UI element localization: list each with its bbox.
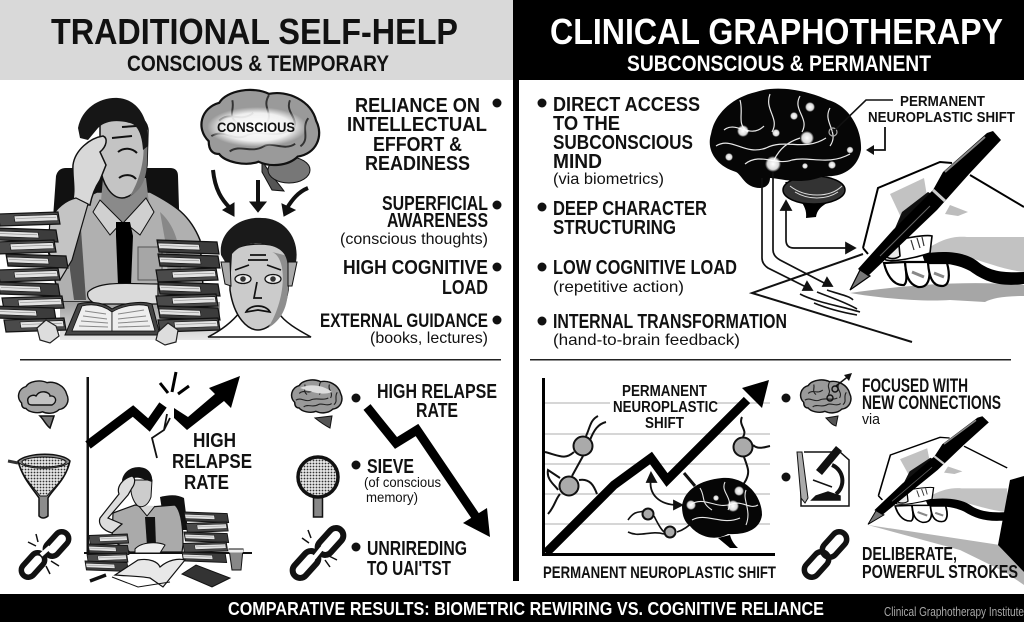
label: high relapse rate: RATE — [416, 400, 458, 422]
icon: sieve funnel — [8, 454, 70, 518]
brain — [682, 478, 762, 548]
label: high relapse rate — [377, 381, 497, 422]
icon: conscious brain — [201, 90, 319, 191]
bullet — [782, 394, 790, 402]
label: unrireding to uaitst: TO UAI'TST — [367, 558, 451, 580]
illustration: man at desk with books — [84, 467, 252, 587]
illustration: stressed man at desk with books — [0, 98, 220, 345]
arrows — [647, 473, 696, 526]
arrows: brain to head — [213, 170, 308, 216]
illustration: hand holding fountain pen — [868, 416, 1024, 585]
illustration: glowing brain — [710, 89, 861, 218]
item: internal transformation: INTERNAL TRANSFORMATION — [553, 311, 787, 333]
label: deliberate powerful strokes — [862, 543, 1018, 582]
divider: left — [20, 359, 501, 360]
icon: brain — [292, 380, 342, 428]
callout: permanent neuroplastic shift: PERMANENT — [900, 94, 985, 110]
chart label: permanent neuroplastic shift: SHIFT — [645, 415, 684, 432]
chart: neuroplastic growth — [542, 378, 775, 556]
chart: axis — [86, 377, 89, 553]
bullet — [782, 472, 790, 482]
column divider — [513, 0, 519, 581]
label: sieve of conscious memory: memory) — [366, 490, 418, 505]
label: focused with new connections via — [862, 376, 1001, 428]
item: reliance on intellectual effort and readiness: INTELLECTUAL — [347, 114, 487, 136]
item: superficial awareness — [340, 193, 502, 248]
crumpled paper — [156, 323, 178, 345]
item: external guidance — [320, 311, 502, 347]
paper with strokes — [752, 254, 912, 342]
bullet list: graphotherapy traits — [538, 94, 787, 349]
item: reliance on intellectual effort and readiness: EFFORT & — [373, 134, 462, 156]
subtitle: subconscious and permanent: SUBCONSCIOUS & PERMANENT — [627, 51, 931, 76]
item: deep character structuring — [538, 198, 707, 239]
item: reliance on intellectual effort and readiness — [347, 95, 502, 175]
label: high relapse rate: RELAPSE — [172, 451, 252, 473]
label: unrireding to uaitst — [367, 538, 467, 580]
item: internal transformation — [538, 311, 787, 349]
item: low cognitive load — [538, 257, 737, 296]
item: external guidance: EXTERNAL GUIDANCE — [320, 311, 488, 332]
divider: right — [530, 359, 1011, 360]
label: focused with new connections via: FOCUSED WITH — [862, 376, 968, 397]
illustration: hand writing with pen — [850, 131, 1024, 302]
label: unrireding to uaitst: UNRIREDING — [367, 538, 467, 560]
subtitle: conscious and temporary: CONSCIOUS & TEMPORARY — [127, 51, 389, 76]
arrows: hand-to-brain feedback loop — [762, 172, 855, 290]
label: high relapse rate: HIGH — [193, 430, 236, 452]
label: permanent neuroplastic shift: PERMANENT NEUROPLASTIC SHIFT — [543, 564, 776, 582]
icon: brain with cloud — [19, 381, 68, 428]
item: high cognitive load: LOAD — [442, 277, 488, 299]
icon: brain with new connections — [801, 373, 852, 426]
label: conscious: CONSCIOUS — [217, 119, 295, 135]
item: superficial awareness: SUPERFICIAL — [382, 193, 488, 215]
icon: chain link — [290, 525, 346, 581]
item: direct access to the subconscious mind: DIRECT ACCESS — [553, 94, 700, 116]
icon: pencil, document and microscope — [797, 446, 849, 506]
icon: broken chain link — [18, 529, 72, 580]
chart label: permanent neuroplastic shift — [613, 383, 718, 432]
label: sieve of conscious memory: (of conscious — [364, 475, 441, 490]
item: deep character structuring: DEEP CHARACTER — [553, 198, 707, 220]
label: sieve of conscious memory — [364, 456, 441, 505]
item: high cognitive load: HIGH COGNITIVE — [343, 257, 488, 279]
item: low cognitive load: LOW COGNITIVE LOAD — [553, 257, 737, 279]
item: reliance on intellectual effort and readiness: RELIANCE ON — [355, 95, 480, 117]
item: direct access to the subconscious mind: MIND — [553, 151, 602, 173]
crumpled paper — [37, 320, 59, 343]
open book — [65, 302, 160, 335]
bullet — [352, 542, 360, 552]
item: superficial awareness: AWARENESS — [387, 210, 488, 232]
item: direct access to the subconscious mind: SUBCONSCIOUS — [553, 132, 693, 154]
item: low cognitive load: (repetitive action) — [553, 279, 684, 296]
label: deliberate powerful strokes: DELIBERATE, — [862, 543, 957, 564]
icon: chain link — [801, 529, 850, 580]
footer bar — [0, 594, 1024, 622]
callout: permanent neuroplastic shift: NEUROPLASTIC SHIFT — [868, 110, 1015, 126]
right book stack — [156, 240, 220, 332]
item: reliance on intellectual effort and readiness: READINESS — [365, 153, 470, 175]
panel: right header — [513, 0, 1024, 80]
item: superficial awareness: (conscious thoughts) — [340, 231, 488, 248]
label: focused with new connections via: via — [862, 411, 881, 428]
item: external guidance: (books, lectures) — [370, 330, 488, 347]
chart: broken rising arrow — [88, 372, 240, 458]
item: direct access to the subconscious mind: (via biometrics) — [553, 171, 664, 188]
bullet list: traditional traits — [320, 95, 502, 347]
item: direct access to the subconscious mind — [538, 94, 700, 188]
bullet — [352, 460, 360, 470]
item: direct access to the subconscious mind: TO THE — [553, 113, 620, 135]
arrow: falling trend — [367, 407, 490, 537]
title: traditional self-help: TRADITIONAL SELF-HELP — [51, 11, 458, 52]
illustration: worried man's head — [208, 218, 311, 337]
item: deep character structuring: STRUCTURING — [553, 217, 676, 239]
chart label: permanent neuroplastic shift: NEUROPLASTIC — [613, 399, 718, 416]
item: high cognitive load — [343, 257, 502, 299]
chart label: permanent neuroplastic shift: PERMANENT — [622, 383, 707, 400]
item: internal transformation: (hand-to-brain feedback) — [553, 332, 740, 349]
neurons — [545, 416, 770, 538]
label: high relapse rate — [172, 430, 252, 494]
panel: left header — [0, 0, 513, 80]
label: sieve of conscious memory: SIEVE — [367, 456, 414, 478]
label: high relapse rate: HIGH RELAPSE — [377, 381, 497, 403]
bullet — [352, 394, 360, 402]
footer title: COMPARATIVE RESULTS: BIOMETRIC REWIRING VS. COGNITIVE RELIANCE — [228, 598, 824, 619]
label: high relapse rate: RATE — [184, 472, 229, 494]
callout: permanent neuroplastic shift — [833, 94, 1015, 155]
left book stack — [0, 212, 68, 332]
icon: sieve magnifier — [298, 457, 338, 517]
